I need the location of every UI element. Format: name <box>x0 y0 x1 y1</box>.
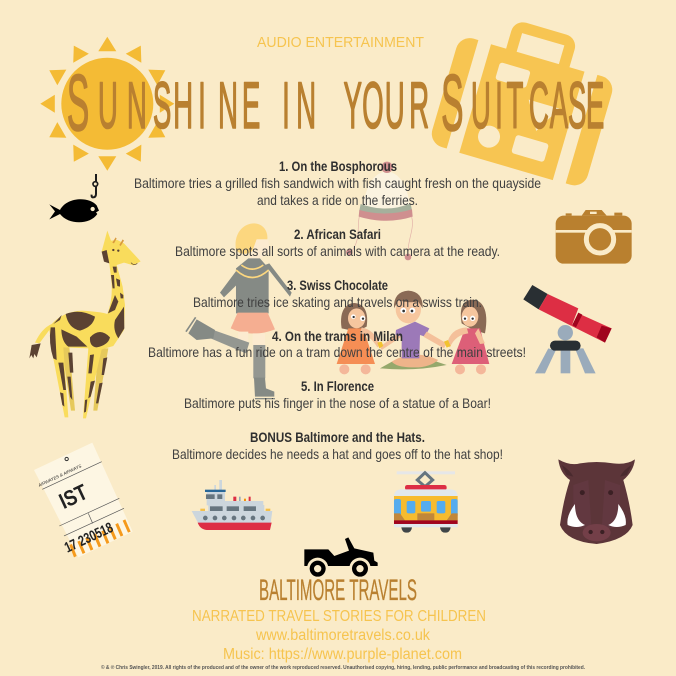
story list: Baltimore puts his finger in the nose of a statue of a Boar! <box>184 396 491 411</box>
title <box>67 58 604 148</box>
music credit: Music: https://www.purple-planet.com <box>223 646 462 663</box>
copyright notice: © & ℗ Chris Swingler, 2019. All rights of the produced and of the owner of the work reproduced reserved. Unauthorised copying, hiring, lending, public performance and broadcasting of this recording prohibited. <box>101 664 585 671</box>
story list: Baltimore spots all sorts of animals with camera at the ready. <box>175 244 500 259</box>
icon: telescope <box>523 285 612 373</box>
title: UITCASE <box>471 68 604 142</box>
right girl <box>461 300 486 333</box>
story list: Baltimore tries ice skating and travels on a swiss train. <box>193 295 482 310</box>
title: S <box>441 58 463 148</box>
title: IN <box>282 68 316 142</box>
illustration: ice skater <box>186 223 292 399</box>
story list: 2. African Safari <box>294 227 381 242</box>
subtitle: audio entertainment: AUDIO ENTERTAINMENT <box>257 35 424 51</box>
story list: 3. Swiss Chocolate <box>287 278 388 293</box>
icon: ferry boat <box>192 480 272 530</box>
icon: luggage tag: IST <box>55 479 92 514</box>
icon: boar head <box>558 459 635 544</box>
illustration: three children <box>337 291 489 374</box>
title: YOUR <box>344 68 429 142</box>
story list: and takes a ride on the ferries. <box>257 193 418 208</box>
story list: Baltimore has a fun ride on a tram down the centre of the main streets! <box>148 345 526 360</box>
icon: camera <box>556 210 632 264</box>
tagline: NARRATED TRAVEL STORIES FOR CHILDREN <box>192 608 486 625</box>
icon: luggage tag: AIRWAYES & AIRWAYS <box>37 463 82 488</box>
title: S <box>67 58 89 148</box>
website: www.baltimoretravels.co.uk <box>255 627 430 644</box>
story list: BONUS Baltimore and the Hats. <box>250 430 425 445</box>
title: UNSHINE <box>98 68 260 142</box>
left girl <box>341 303 367 332</box>
story list: 5. In Florence <box>301 379 374 394</box>
icon: fish and hook <box>49 174 99 222</box>
story list: 1. On the Bosphorous <box>279 159 397 174</box>
icon: suitcase <box>428 6 624 189</box>
story list: Baltimore decides he needs a hat and goes off to the hat shop! <box>172 447 503 462</box>
icon: winter hat <box>346 162 413 260</box>
icon: luggage tag <box>34 443 133 557</box>
story list <box>134 159 541 462</box>
story list: 4. On the trams in Milan <box>272 329 403 344</box>
mat <box>380 360 447 369</box>
icon: tram <box>394 471 458 533</box>
icon: jeep <box>304 537 378 579</box>
story list: Baltimore tries a grilled fish sandwich with fish caught fresh on the quayside <box>134 176 541 191</box>
icon: sun <box>40 37 174 171</box>
illustration: giraffe <box>29 231 141 418</box>
icon: luggage tag: 17 230518 <box>62 520 116 556</box>
brand name: BALTIMORE TRAVELS <box>259 574 417 607</box>
